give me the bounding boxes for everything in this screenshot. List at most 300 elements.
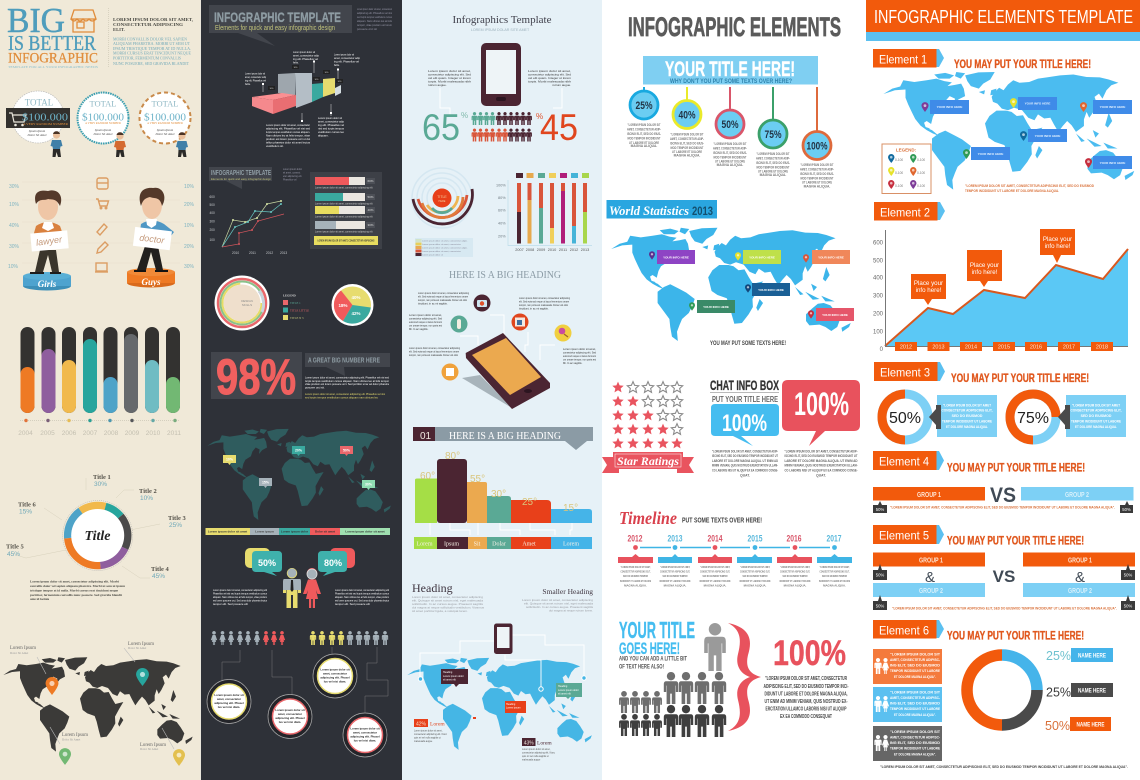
lollipop captions: MOD TEMPOR INCIDIDUNT (756, 166, 790, 170)
line chart: 2011 (249, 251, 256, 255)
stat tag: 43%: Lorem (537, 740, 552, 746)
map: element 1: YOUR INFO HERE (1035, 134, 1060, 138)
badge: total 3: Dolor Sit Amet (154, 132, 175, 136)
line chart: 100 (210, 238, 215, 242)
chat info box: ISCING ELIT, SED DO EIUSMOD TEMPOR INCIDIDUNT UT (784, 454, 858, 458)
element 3 notes: CONSECTETUR ADIPISCING ELIT, (1070, 408, 1122, 412)
ring chart: design skills: DESIGN (241, 299, 253, 303)
donut chart: title: 30% (94, 481, 107, 488)
couple descriptions: tempor elit. Sed posuere elit (335, 602, 370, 606)
element 1 tag (873, 49, 944, 68)
chart: 3d steps (252, 60, 343, 122)
bar chart: rounded bars: Ipsum (444, 542, 459, 548)
big number 98%: Lorem ipsum dolor sit amet, consectetur adipiscing elit. Phasellus vel nisi sed (305, 376, 389, 380)
headings and lorem text: Smaller Heading (542, 587, 593, 596)
legend: LEGEND (283, 294, 297, 298)
donut description: Lorem ipsum dolor sit amet, consectetur adipiscing elit. Morbi (30, 580, 119, 584)
line chart: 300 (210, 220, 215, 224)
timeline: "LOREM IPSUM DOLOR SIT AMET, (740, 565, 770, 569)
donut legend: NAME HERE (1076, 722, 1104, 728)
star ratings: Star Ratings (617, 454, 679, 468)
timeline: SED DO EIUSMOD TEMPOR (742, 574, 768, 578)
timeline: "LOREM IPSUM DOLOR SIT AMET, (820, 565, 850, 569)
headings and lorem text: elit. Quisque sit amet rutrum nisl, eget malesuada (412, 598, 484, 602)
timeline: MAGNA ALIQUA. (624, 584, 647, 588)
arc legend: Lorem ipsum dolor sit amet, consectetur adipis (422, 246, 468, 250)
map: dark world with pins: Lorem Ipsum (128, 642, 154, 647)
bar chart: rounded bars: Amet (522, 542, 536, 548)
big number 98%: A GREAT BIG NUMBER HERE (308, 356, 380, 364)
donut chart: title: Title 5 (6, 544, 25, 550)
stacked bar chart (496, 173, 592, 252)
banner: 01 big heading: 01 (420, 431, 432, 442)
badge: total 3: $100.000 (144, 112, 186, 124)
timeline: MAGNA ALIQUA. (784, 584, 807, 588)
heading: LOREM IPSUM DOLAR SITE AMET (471, 28, 530, 32)
chat info box: QUAT. (740, 474, 750, 478)
percent rows: 30% (9, 244, 20, 250)
map: element 1: YOUR INFO HERE (1025, 102, 1050, 106)
title box: YOUR TITLE HERE! (665, 58, 795, 81)
bar chart: rounded bars: Dolar (492, 542, 506, 548)
timeline: "LOREM IPSUM DOLOR SIT AMET, (620, 565, 651, 569)
side note: adipiscing elit. Phasellus vel nisi (357, 12, 392, 15)
timeline: INCIDIDUNT UT LABORE ET DOLORE (740, 579, 771, 583)
badge: total 2: Dolor Sit Amet (92, 132, 113, 136)
element 6 cards: TEMPOR INCIDIDUNT UT LABORE (890, 707, 940, 711)
horizontal bars panel: 50% (367, 195, 374, 199)
connectors and circles: Lorem ipsum dolor sit (320, 668, 350, 672)
element 3 tag: Element 3 (880, 366, 930, 380)
timeline: INCIDIDUNT UT LABORE ET DOLORE (700, 579, 731, 583)
stat tag: 42%: consectetur adipiscing elit. Nunc (414, 733, 448, 736)
side note: Lorem ipsum dolor sit amet, consectetur (357, 8, 392, 11)
connectors and circles (207, 647, 388, 757)
chat info box: PUT YOUR TITLE HERE (712, 395, 778, 404)
headings and lorem text: elit. Quisque sit amet rutrum nisl, eget malesuada (524, 602, 593, 606)
banner: world statistics (606, 200, 717, 218)
timeline (618, 508, 852, 588)
element 6 title: YOU MAY PUT YOUR TITLE HERE! (947, 630, 1084, 642)
pie chart: 18% (338, 303, 348, 308)
person rows (211, 631, 388, 645)
couple descriptions: Lorem ipsum dolor sit amet, consectetur adipiscing elit (213, 588, 267, 592)
title box (643, 56, 818, 85)
title: big is better: TEMPLATE FOR ALL YOUR INFOGRAPHIC NEEDS (8, 65, 98, 69)
stat tag: 43%: 43% (524, 740, 534, 746)
element 6 cards: ET DOLORE MAGNA ALIQUA". (894, 752, 936, 756)
area chart: 400 (873, 276, 884, 282)
bar chart: rounded bars (414, 451, 592, 549)
group comparison with ampersand (873, 552, 1135, 610)
headings and lorem text: dui magna at neque sollicitudin vestibulum. Vivamus (412, 606, 485, 610)
ring chart: design skills: SKILLS (242, 303, 252, 307)
lollipop captions: ISCING ELIT, SED DO EIUS- (670, 142, 704, 146)
header (866, 0, 1140, 41)
bar chart: rounded bars: Sit (474, 542, 481, 548)
chart annotations: ing elit. Phasellus vel (334, 60, 359, 64)
connectors and circles: Lorem ipsum dolor sit (350, 726, 380, 730)
element 6 tag: Element 6 (879, 624, 929, 638)
percent rows: 10% (9, 202, 20, 208)
map: element 1: YOUR INFO HERE (978, 152, 1003, 156)
stacked bar chart: 2012 (570, 248, 578, 252)
chat info box: MINIM VENIAM, QUIS NOSTRUD EXERCITATION ULLAM- (712, 464, 778, 468)
element 4 tag (873, 451, 944, 470)
connectors and circles: adipiscing elit. Phasel (214, 701, 244, 705)
legend (283, 294, 309, 320)
bar chart: pill bars: 2007 (83, 430, 98, 437)
bar chart: pill bars: 2006 (62, 430, 77, 437)
chart: 3d steps: 10% (324, 72, 329, 74)
your title goes here: AND YOU CAN ADD A LITTLE BIT (619, 656, 687, 662)
big stat 100%: UT ENIM AD MINIM VENIAM, QUIS NOSTRUD EX- (764, 699, 848, 705)
your title goes here: GOES HERE! (619, 639, 680, 658)
stat tag: 43%: Lorem ipsum dolor sit amet, (522, 748, 551, 751)
donut chart: title: Title 6 (18, 502, 37, 508)
chart annotations: ing elit. Phasellus vel (293, 57, 318, 61)
lollipop captions: MAGNA ALIQUA. (760, 173, 786, 177)
donut 75% (1010, 394, 1056, 440)
group comparison with ampersand: 50% (876, 572, 884, 578)
timeline: "LOREM IPSUM DOLOR SIT AMET, (660, 565, 690, 569)
character: lawyer on girls platform (23, 190, 71, 290)
horizontal bars panel: 40% (367, 208, 374, 212)
lollipop captions: UT LABORE ET DOLORE (672, 150, 703, 154)
map: dotted teal world: 20% (295, 448, 303, 452)
tablet icon captions: tempor, non porta est malesuada. Donec vel odio (409, 353, 458, 357)
big stat 100%: EX EA COMMODO CONSEQUAT (780, 714, 832, 720)
tablet captions: turpis. Morbi malesuada nibh (428, 80, 471, 84)
title: big is better: INFOGRAPHIC (8, 50, 98, 66)
people pyramid (619, 623, 726, 737)
lollipop captions: MOD TEMPOR INCIDIDUNT (714, 156, 746, 160)
element 3 notes (929, 395, 1126, 437)
donut description: convallis dolor vel sapien aliquam pharetra. Morbi ut sem ut ipsum (30, 584, 125, 588)
badge: total 3: TOTAL (151, 98, 179, 108)
connectors and circles: adipiscing elit. Phasel (320, 676, 350, 680)
arc legend: Lorem ipsum dolor sit amet, consectetur (422, 250, 461, 253)
timeline: MAGNA ALIQUA. (744, 584, 767, 588)
speech bubbles and couple (245, 548, 355, 608)
stat tag: 42%: Lorem (430, 722, 445, 728)
chart annotations: Lorem ipsum dolor sit (318, 116, 342, 120)
element 3 notes: ET DOLORE MAGNA ALIQUA. (946, 425, 988, 429)
timeline: INCIDIDUNT UT LABORE ET DOLORE (819, 579, 850, 583)
lollipop captions: AMET, CONSECTETUR ADIP- (627, 128, 661, 132)
chart annotations: tellus pharetra dolor sit amet lectus (266, 140, 311, 144)
chat info box: 100% (722, 410, 767, 437)
big number 98%: vitae pretium est lorem posuere orci. Sed porttitor urna vel dolor pharetra (305, 382, 389, 386)
lollipop percent circles (630, 87, 831, 160)
line chart: 500 (210, 203, 215, 207)
stacked bar chart: 2009 (537, 248, 545, 252)
bar chart: rounded bars: 15° (563, 503, 578, 514)
tablet icon captions: consectetur adipiscing elit. Sed (563, 350, 597, 354)
element 1 caption: TEMPOR INCIDIDUNT UT LABORE ET DOLORE MAGNA ALIQUA. (965, 189, 1059, 193)
title: big is better (7, 1, 98, 69)
title box: WHY DON'T YOU PUT SOME TEXTS OVER HERE? (670, 79, 792, 85)
map: dark world with pins: Dolor Sit Amet (62, 738, 81, 742)
element 5 tag (873, 525, 944, 544)
isometric tablet with icons (442, 294, 572, 409)
people rows (472, 112, 532, 142)
timeline: SED DO EIUSMOD TEMPOR (782, 574, 808, 578)
chart annotations: Lorem ipsum dolor sit (293, 50, 315, 54)
line chart (210, 195, 287, 255)
timeline: 2013 (668, 534, 682, 544)
element 6 cards: ING ELIT, SED DO EIUSMOD (890, 664, 940, 668)
area chart: info here! (916, 287, 942, 294)
timeline: "LOREM IPSUM DOLOR SIT AMET, (700, 565, 730, 569)
chat info box (710, 377, 860, 478)
stat: 65 and 45 percent (422, 107, 578, 148)
donut 50%: 50% (889, 410, 921, 427)
badge: total 1: A VERY RANDOM NUMBER (23, 122, 68, 126)
map legend: 0-100 (895, 158, 903, 162)
chat info box: MINIM VENIAM, QUIS NOSTRUD EXERCITATION ULLAM- (784, 464, 858, 468)
side note: tempor, vitae pretium est lorem (357, 24, 392, 27)
connectors and circles: amet, consectetur (353, 730, 378, 734)
element 6 cards (873, 649, 942, 761)
connectors and circles: lus vel nisi diam. (354, 738, 376, 742)
tablet captions: turpis. Morbi malesuada nibh (528, 80, 571, 84)
tablet icon captions (409, 291, 597, 365)
map: blue world with phone: Heading (506, 703, 516, 706)
map: dotted teal world: 50% (343, 448, 351, 452)
tablet icon captions: Lorem ipsum dolor sit amet, consectetur adipiscing (519, 296, 570, 300)
chat info box: CO LABORIS NISI UT ALIQUIP EX EA COMMODO CONSE- (784, 468, 858, 472)
element 3 notes: CONSECTETUR ADIPISCING ELIT, (942, 408, 993, 412)
side note: sed turpis tempus vestibulum cursus (357, 16, 393, 19)
horizontal bars panel: Lorem ipsum dolor sit amet, consectetur adipiscing elit (315, 186, 373, 190)
panel: dark infographic template (200, 0, 402, 780)
map: dark world with pins: Lorem Ipsum (140, 743, 166, 748)
stacked bar chart: 80% (498, 196, 506, 200)
element 6 cards: AMET, CONSECTETUR ADIPISC- (890, 696, 941, 700)
headings and lorem text: Lorem ipsum dolor sit amet, consectetur adipiscing (522, 598, 593, 602)
horizontal bars panel: 60% (367, 179, 374, 183)
timeline: 2015 (748, 534, 762, 544)
title: INFOGRAPHIC ELEMENTS (628, 12, 841, 42)
couple descriptions: Phasellus vel nisi sed turpis tempus vestibulum cursus (213, 592, 267, 596)
chat info box: LABORE ET DOLORE MAGNA ALIQUA. UT ENIM AD (784, 459, 858, 463)
map: world statistics: YOUR INFO HERE (758, 288, 784, 292)
stacked bar chart: 2007 (515, 248, 524, 252)
donut chart: title: Title (85, 529, 110, 544)
element 1 caption: "LOREM IPSUM DOLOR SIT AMET, CONSECTETUR ADIPISCING ELIT, SED DO EIUSMOD (965, 184, 1094, 188)
donut legend (1045, 648, 1113, 733)
legend bar: Lorem ipsum dolor (281, 530, 309, 534)
chat info box: ISCING ELIT, SED DO EIUSMOD TEMPOR INCIDIDUNT UT (712, 454, 778, 458)
chat info box: "LOREM IPSUM DOLOR SIT AMET, CONSECTETUR ADIP- (784, 450, 858, 454)
map legend: 0-100 (895, 171, 903, 175)
horizontal bars panel: LOREM IPSUM DOLOR SIT AMET, CONSECTETUR ADIPISCING (318, 240, 375, 242)
element 3 notes: TEMPOR INCIDIDUNT UT LABORE (1071, 420, 1122, 424)
map: world statistics: YOUR INFO HERE (749, 256, 775, 260)
chart annotations: vestibulum cursus leo (318, 130, 344, 134)
area chart: Place your (914, 280, 943, 287)
area chart: 2016 (1030, 344, 1042, 350)
map: dark world with pins: Lorem Ipsum (62, 733, 88, 738)
chart annotations: vestibulum sit. (266, 144, 284, 148)
timeline: 2016 (786, 534, 802, 544)
stacked bar chart: 100% (496, 184, 506, 188)
map: blue world with phone: Lorem ipsum (506, 706, 520, 710)
pie chart: 40% (351, 295, 361, 300)
lollipop captions (627, 123, 834, 188)
bar chart: pill bars: 2009 (125, 430, 140, 437)
legend: TITLE 1 (290, 301, 301, 305)
element 3 notes: ET DOLORE MAGNA ALIQUA. (1075, 425, 1117, 429)
icons column (95, 178, 108, 272)
percent rows: 20% (184, 202, 195, 208)
arc legend: Lorem ipsum dolor sit amet, consectetur adipis (422, 240, 468, 242)
timeline: MAGNA ALIQUA. (823, 584, 846, 588)
headings and lorem text: Heading (412, 581, 453, 595)
map: dotted teal world: 30% (365, 482, 373, 486)
line chart: 400 (210, 211, 215, 215)
map: world statistics: YOUR INFO HERE (822, 313, 848, 317)
lollipop captions: MAGNA ALIQUA. (717, 163, 743, 167)
lollipop captions: AMET, CONSECTETUR ADIP- (800, 168, 834, 172)
stacked bar chart: 2010 (548, 248, 556, 252)
donut chart: title: 45% (7, 551, 20, 558)
element 5 title: YOU MAY PUT YOUR TITLE HERE! (947, 536, 1084, 548)
arc legend (415, 238, 473, 257)
headings and lorem text: sollicitudin. In ac cursus augue. Praesent sagittis (412, 602, 484, 606)
tablet captions: Lorem ipsum dolor sit amet, (428, 69, 471, 73)
big number 98% (211, 349, 390, 405)
donut legend: 25% (1046, 686, 1071, 700)
element 6 cards: "LOREM IPSUM DOLOR SIT (890, 730, 941, 734)
legend bar: Dolor sit amet (315, 530, 335, 534)
percent rows: 10% (184, 223, 195, 229)
stat: 65 and 45 percent: 45 (540, 107, 578, 148)
chart annotations: turpis tempus vestibulum cursus aliquam. (266, 130, 310, 134)
line chart: 2010 (232, 251, 239, 255)
group comparison 1 vs 2: GROUP 2 (1065, 490, 1089, 499)
tablet icon captions: Lorem ipsum dolor sit amet, consectetur adipiscing (409, 346, 460, 350)
map: blue world with phone (407, 624, 592, 750)
heading: small infographic template: etur adipiscing elit. (283, 175, 302, 178)
timeline: CONSECTETUR ADIPISCING ELIT, (660, 570, 690, 574)
banner: world statistics: World Statistics (609, 203, 689, 218)
tablet icon captions: euismod neque ut lacus ferment (563, 354, 596, 358)
group comparison 1 vs 2: 50% (876, 507, 884, 512)
timeline: CONSECTETUR ADIPISCING ELIT, (820, 570, 850, 574)
tablet captions (428, 69, 572, 87)
legend: TITLE LITTLE (290, 308, 309, 312)
line chart: 2013 (280, 251, 287, 255)
badge: total 2: $100.000 (82, 112, 124, 124)
element 3 notes: SED DO EIUSMOD (952, 414, 983, 418)
stat tag: 43% (522, 738, 556, 762)
title: big is better: IS BETTER (8, 31, 96, 55)
map: blue world with phone: Lorem ipsum dolor (443, 675, 464, 678)
element 1 title: YOU MAY PUT YOUR TITLE HERE! (954, 59, 1091, 71)
ring chart: design skills (214, 276, 270, 330)
big stat 100% (764, 634, 849, 720)
area chart: 600 (873, 240, 884, 246)
percent rows: 30% (9, 184, 20, 190)
character: lawyer on girls platform: lawyer (35, 234, 64, 248)
horizontal bars panel: Lorem ipsum dolor sit amet, consectetur adipiscing elit (315, 230, 373, 234)
speech bubbles and couple: 80% (324, 558, 342, 568)
group comparison with ampersand: GROUP 1 (919, 556, 943, 564)
title: big is better: BIG (7, 1, 65, 40)
donut chart: title: 10% (140, 495, 153, 502)
connectors and circles: Lorem ipsum dolor sit (214, 693, 244, 697)
badge: total 1: TOTAL (25, 98, 53, 108)
tablet icon captions: tempor, non porta est malesuada. Donec vel odio (418, 298, 467, 302)
timeline: CONSECTETUR ADIPISCING ELIT, (780, 570, 810, 574)
chart annotations: pretium est lorem posuere orci ut dui (266, 137, 310, 141)
horizontal bars panel: Lorem ipsum dolor sit amet, consectetur adipiscing elit (315, 216, 373, 218)
donut chart: title: Title 4 (151, 566, 170, 573)
donut chart: title: 25% (169, 522, 182, 529)
percent rows: 20% (184, 244, 195, 250)
stat: 65 and 45 percent: % (461, 111, 468, 120)
horizontal bars panel (310, 172, 382, 249)
map legend: LEGEND: (896, 148, 917, 152)
map: blue world with phone: Lorem ipsum dolor (558, 689, 579, 692)
donut legend: NAME HERE (1078, 688, 1106, 694)
lollipop captions: "LOREM IPSUM DOLOR SIT (800, 163, 834, 167)
heading: Infographics Template (452, 14, 552, 26)
couple descriptions: Phasellus vel nisi sed turpis tempus vestibulum cursus (335, 592, 389, 596)
character: doctor on guys platform: Guys (141, 277, 161, 287)
chart annotations: ing elit. Phasellus vel (245, 78, 266, 82)
banner: world statistics: 2013 (692, 204, 713, 218)
chart annotations: adipiscing elit. Phasellus vel nisi sed (266, 126, 310, 130)
map: dotted teal world: 10% (226, 458, 234, 462)
element 2 tag (874, 202, 945, 220)
lollipop captions: MAGNA ALIQUA. (674, 154, 700, 158)
chat info box: QUAT. (816, 474, 826, 478)
side note (357, 8, 393, 31)
group comparison with ampersand: 50% (876, 604, 884, 608)
element 6 cards: AMET, CONSECTETUR ADIPISC- (890, 736, 941, 740)
lollipop percent circles: 50% (722, 119, 739, 131)
couple descriptions: tempor elit. Sed posuere elit (213, 602, 248, 606)
element 4 title: YOU MAY PUT YOUR TITLE HERE! (947, 462, 1085, 474)
chart annotations: nisi sed turpis tempus (318, 126, 345, 130)
chat info box: "LOREM IPSUM DOLOR SIT AMET, CONSECTETUR ADIP- (712, 450, 778, 454)
donut description: tristique tempor at id nulla. Morbi cursus erat tincidunt neque (30, 588, 119, 592)
big stat 100%: DIDUNT UT LABORE ET DOLORE MAGNA ALIQUA, (764, 692, 848, 698)
bar chart: rounded bars: 25° (522, 497, 537, 508)
lollipop captions: ISCING ELIT, SED DO EIUS- (800, 172, 834, 176)
timeline: CONSECTETUR ADIPISCING ELIT, (740, 570, 770, 574)
chart annotations: Nam ultrices leo at felis tempor, vitae (266, 134, 310, 138)
brace (728, 623, 761, 731)
heading: infographic template (209, 5, 352, 46)
lollipop captions: UT LABORE ET DOLORE (758, 170, 789, 174)
area chart: 100 (873, 330, 884, 336)
intro text: MORBI CURSUS ERAT TINCIDUNT NEQUE (113, 52, 192, 56)
area chart: 0 (880, 347, 884, 353)
stacked bar chart: 60% (498, 208, 506, 212)
map legend: 0-100 (917, 158, 925, 162)
stacked bar chart: 2011 (559, 248, 567, 252)
stat tag: 42%: 42% (416, 721, 427, 727)
map: blue world with phone: sit amet elit (558, 692, 571, 696)
tablet icon captions: Mi. In ac sagittis. (409, 327, 429, 331)
intro text: NUNC POSUERE, SED GRAVIDA BLANDIT (113, 62, 190, 67)
timeline: INCIDIDUNT UT LABORE ET DOLORE (660, 579, 691, 583)
map: dark world with pins: Dolor Sit Amet (140, 747, 159, 751)
